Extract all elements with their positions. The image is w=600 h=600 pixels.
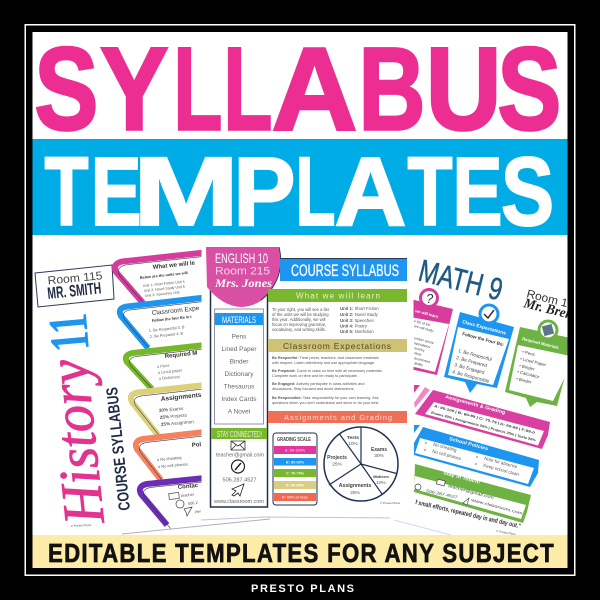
section: classroom expectations: discussions. Stay focused and avoid distractions. <box>272 387 355 391</box>
tab: what we will learn: Unit 3: Speeches Unit <box>145 290 180 298</box>
tab: assignments: Assignments <box>160 392 202 403</box>
card: required materials: • Calculator <box>517 369 540 380</box>
subtitle band <box>32 535 568 568</box>
icon: envelope <box>231 441 245 450</box>
card: class expectations: 4. Be Responsible <box>452 369 490 384</box>
pie chart: Midterm <box>373 474 389 479</box>
tab: contact: Contac <box>178 483 199 491</box>
title: syllabus: B <box>358 24 426 156</box>
card: class expectations: 3. Be Engaged <box>454 362 485 375</box>
title: templates: M <box>133 137 239 246</box>
pie chart: Assignments <box>339 483 371 489</box>
section: what we will learn: focus on improving grammar, <box>272 322 326 327</box>
card: class expectations: 2. Be Prepared <box>456 355 488 368</box>
card: what we will learn: we will study: <box>414 324 435 333</box>
ribbon: stay in touch <box>414 464 531 523</box>
materials box: Binder <box>230 358 249 366</box>
tab: what we will learn: Unit 2: Novel Study Unit 5 <box>144 285 185 293</box>
card: what we will learn: asurement <box>414 356 431 364</box>
room and teacher: Room 1 <box>525 288 569 310</box>
ribbon: school policies: School Policies <box>448 436 489 452</box>
pie chart: 10% <box>348 441 358 446</box>
section: classroom expectations: questions when you don't understand and strive to do your best. <box>272 401 380 405</box>
tab: contact: 506.2 <box>188 500 199 506</box>
tab: contact <box>140 478 208 528</box>
section: classroom expectations: with respect. Listen attentively and use appropriate language. <box>272 361 375 365</box>
title: syllabus: S <box>34 24 98 156</box>
accent stripes <box>414 385 430 433</box>
materials box: Lined Paper <box>221 346 257 353</box>
icon: cursor arrow <box>232 484 244 496</box>
ribbon: assignments and grading: Assignments & Grading <box>444 394 506 416</box>
panel: math 9 syllabus page <box>394 253 579 537</box>
ribbon: assignments and grading <box>415 390 550 449</box>
card: required materials: • Binder <box>516 376 532 385</box>
ribbon: school policies: Note for absence <box>484 456 519 469</box>
card: what we will learn: ? <box>426 291 434 306</box>
tab: classroom expectations: 1. Be Respectful 3. B <box>149 325 185 333</box>
quote: © Presto Plans <box>496 529 517 537</box>
section: classroom expectations: Be Prepared: Come to class on time with all necessary materials. <box>272 369 383 373</box>
card: what we will learn: we will learn <box>414 308 439 319</box>
section: what we will learn: Unit 2: Novel Study <box>340 312 379 317</box>
tab: contact: ww <box>195 508 201 514</box>
section: what we will learn: this year. Additionally, we will <box>272 317 326 322</box>
history 11 heading: 11 <box>37 311 102 354</box>
pie chart: 25% <box>332 462 343 468</box>
section: what we will learn: Unit 4: Poetry <box>340 324 368 328</box>
ribbon: stay in touch: teacher@gmail.com <box>448 483 495 500</box>
pie chart: Projects <box>327 455 347 461</box>
tab: required materials: o Pens <box>157 363 169 369</box>
ribbon: stay in touch: Stay in Touch! <box>442 470 481 486</box>
title: templates: E <box>91 137 142 246</box>
pie chart: Exams <box>371 447 387 453</box>
card: required materials: Required Materials <box>522 336 560 350</box>
ribbon: assignments and grading: Exams 30% | Assignments 25% | Projects 25% | Tests 20% <box>431 411 536 442</box>
card: class expectations: Follow the Four Bs: <box>462 331 505 347</box>
tab: assignments <box>131 385 208 438</box>
card: required materials <box>505 321 575 407</box>
tab: what we will learn: Unit 1: Short Fiction Unit 4 <box>143 280 185 288</box>
tab: assignments: 25% Projects <box>160 413 188 420</box>
grading scale: D: 60-69% <box>286 484 305 488</box>
quote: f small efforts, repeated day in and day out." <box>415 499 521 530</box>
card: what we will learn: operations <box>414 341 431 349</box>
room label: MR. SMITH <box>47 279 102 303</box>
stay connected block: teacher@gmail.com <box>216 452 265 458</box>
brand name: PRESTO PLANS <box>251 583 354 595</box>
course syllabus banner <box>280 258 407 281</box>
tab: what we will learn: What we will le <box>153 261 196 271</box>
ribbon: school policies: Keep school clean <box>483 463 520 477</box>
section: what we will learn <box>268 289 407 334</box>
section: assignments and grading <box>268 411 407 423</box>
tab: classroom expectations: Classroom Expe <box>151 305 200 317</box>
card: what we will learn: ability <box>414 361 424 367</box>
title: templates: T <box>44 137 88 246</box>
section: classroom expectations <box>268 339 407 405</box>
history 11 heading: History <box>35 356 117 528</box>
ribbon: school policies <box>414 427 539 487</box>
ribbon: school policies: No cheating <box>433 442 458 453</box>
pink name badge: Mrs. Jones <box>214 276 272 290</box>
tab: classroom expectations: 2. Be Prepared 4. B <box>150 331 184 339</box>
section: what we will learn: Unit 1: Short Fiction <box>340 306 379 311</box>
title band <box>32 139 568 235</box>
section: classroom expectations: Be Engaged: Actively participate in class activities and <box>272 382 364 386</box>
pie chart: Tests <box>347 435 359 441</box>
ribbon: school policies: No cell phones <box>432 449 463 461</box>
section: what we will learn: Unit 5: Nonfiction <box>340 329 374 334</box>
section: what we will learn: of the units we will be studying <box>272 312 329 317</box>
card: class expectations: Class Expectations <box>462 319 507 336</box>
title: templates: T <box>408 137 452 246</box>
section: classroom expectations: Complete work on time and be ready to participate. <box>272 374 358 378</box>
page background <box>202 243 414 518</box>
pie chart: 25% <box>350 490 361 496</box>
section: what we will learn: vocabulary, and writing skills. <box>272 327 326 332</box>
tab: what we will learn <box>115 252 208 306</box>
tab: assignments: 25% Assignmen <box>161 419 194 427</box>
card: what we will learn: ebra <box>414 351 422 357</box>
section: classroom expectations: Be Responsible: Take responsibility for your own learning. Ask <box>272 396 379 400</box>
copyright: © Presto Plans <box>380 501 401 505</box>
tab: policies: Pol <box>192 442 202 449</box>
tab: policies: o No cheating <box>157 455 182 462</box>
tab: required materials: o Lined paper <box>158 367 183 375</box>
copyright: © Presto Plans <box>71 523 92 528</box>
ribbon: assignments and grading: A: 90-100 | B: 80-89 | C: 70-79 | D: 60-69 | F:59-0 <box>434 404 535 435</box>
tab: policies: o No cell phones <box>158 461 188 469</box>
stay connected block: 506.287.4527 <box>222 478 256 484</box>
title: syllabus: Y <box>100 24 168 156</box>
pie chart: 30% <box>374 453 385 459</box>
materials box <box>214 309 264 424</box>
course syllabus vertical label: COURSE SYLLABUS <box>104 386 134 511</box>
title: templates: S <box>501 137 554 246</box>
tab: what we will learn: Below are the units we will <box>140 271 188 280</box>
materials box: Thesaurus <box>224 384 255 390</box>
section: what we will learn: What we will learn <box>296 292 380 300</box>
room label <box>35 265 114 307</box>
title: syllabus: S <box>497 24 561 156</box>
course syllabus banner: COURSE SYLLABUS <box>291 261 399 280</box>
math 9 heading: MATH 9 <box>415 253 506 307</box>
pink name badge: ENGLISH 10 <box>215 250 268 266</box>
card: what we will learn: k list of the <box>414 319 431 327</box>
grading scale: F: 60% or less <box>282 496 308 500</box>
panel: english 10 syllabus page <box>201 243 414 520</box>
card: what we will learn <box>410 290 453 375</box>
pink name badge <box>206 247 281 307</box>
stay connected block: STAY CONNECTED! <box>217 430 262 439</box>
section: what we will learn: Unit 3: Speeches <box>340 318 374 323</box>
pie chart: 10% <box>376 480 386 485</box>
title: templates: L <box>296 137 336 246</box>
grading scale: A: 90-100% <box>285 448 306 452</box>
grading scale: GRADING SCALE <box>277 437 311 443</box>
stay connected block <box>211 428 267 505</box>
pink name badge: Room 215 <box>215 266 270 278</box>
ribbon: stay in touch: www.classroom.com <box>471 497 524 516</box>
materials box: MATERIALS <box>222 315 256 326</box>
card: class expectations <box>444 305 514 393</box>
tab: classroom expectations: Follow the four Bs in t <box>152 315 192 323</box>
title: templates: A <box>334 137 406 246</box>
icon: phone <box>232 460 244 473</box>
room and teacher: Mr. Brent <box>521 296 579 324</box>
page edge shadow <box>201 517 390 520</box>
page edge shadow <box>122 519 270 534</box>
card: required materials: • Pens <box>522 349 536 357</box>
tab: classroom expectations <box>120 298 208 351</box>
materials box: Index Cards <box>221 396 257 403</box>
tab: required materials <box>126 345 208 392</box>
section: classroom expectations: Classroom Expectations <box>283 341 391 351</box>
ribbon: stay in touch: 506.287.4527 <box>426 488 459 500</box>
tab: required materials: Required M <box>165 351 198 360</box>
title: templates: E <box>452 137 502 246</box>
title: syllabus: L <box>223 24 272 156</box>
card: required materials: • Binder <box>519 363 535 372</box>
section: what we will learn: To your right, you will see a list <box>272 307 330 312</box>
grading scale: B: 80-89% <box>286 460 305 464</box>
sidebar outline <box>210 290 268 507</box>
tab: contact: teacher <box>181 492 195 498</box>
title: syllabus: A <box>272 24 358 156</box>
title: syllabus: U <box>426 24 502 156</box>
card: what we will learn: umber sense <box>414 336 434 345</box>
section: assignments and grading: Assignments and Grading <box>284 413 392 422</box>
tab: assignments: 30% Exams <box>159 406 184 413</box>
section: classroom expectations: Be Respectful: Treat peers, teachers, and classroom materials <box>272 356 379 360</box>
pie chart <box>324 427 398 501</box>
card: what we will learn: ometry <box>414 346 425 353</box>
materials box: Pens <box>232 334 247 340</box>
card: class expectations: 1. Be Respectful <box>458 348 492 362</box>
panel: history syllabus page <box>35 252 270 534</box>
page edge shadow <box>394 520 451 535</box>
materials box: Dictionary <box>225 371 254 378</box>
room and teacher <box>522 290 568 318</box>
card: required materials: • Lined Paper <box>520 356 547 367</box>
tab: required materials: o Dictionary <box>159 374 180 381</box>
grading scale: C: 70-79% <box>286 472 305 476</box>
title: templates: P <box>234 137 296 246</box>
room label: Room 115 <box>47 270 103 287</box>
title: syllabus: L <box>173 24 222 156</box>
stay connected block: www.classroom.com <box>214 499 265 505</box>
materials box: A Novel <box>228 408 251 416</box>
grading scale <box>273 433 317 505</box>
tab: policies <box>136 432 208 483</box>
